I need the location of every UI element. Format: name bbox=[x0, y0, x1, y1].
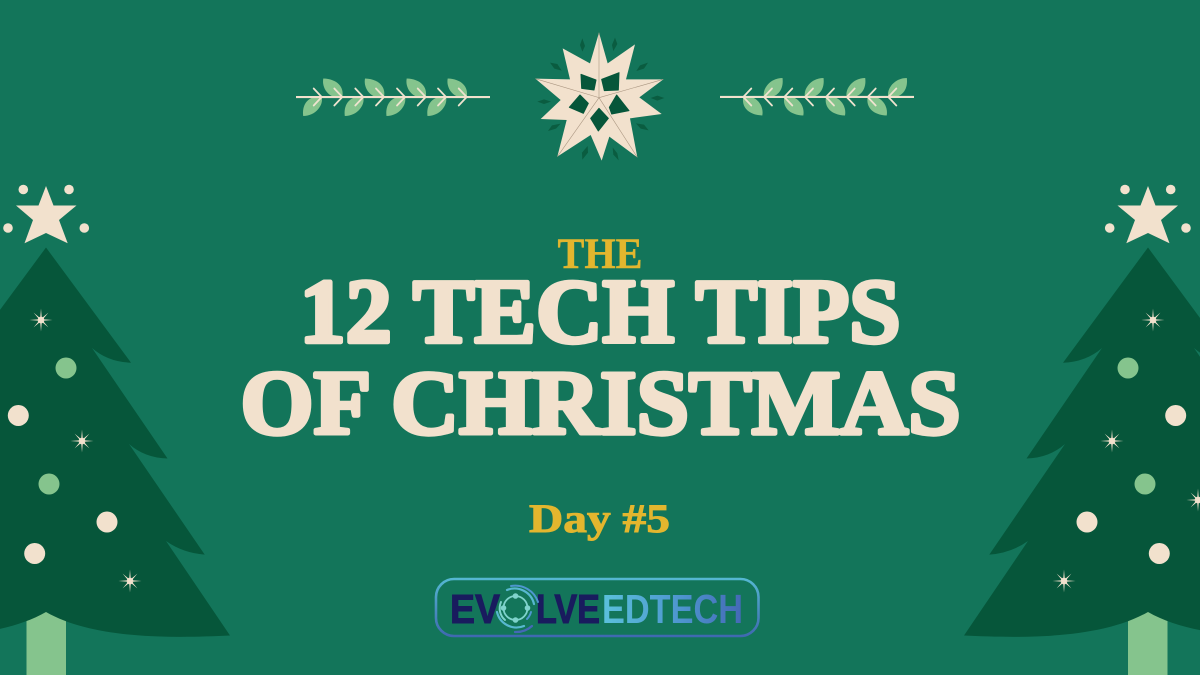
subheading: Day #5: Day #5 bbox=[529, 496, 670, 541]
title: OF CHRISTMAS bbox=[240, 352, 960, 454]
logo wordmark: EDTECH: EDTECH bbox=[602, 586, 743, 632]
logo wordmark: EVOLVE: EV bbox=[450, 586, 501, 632]
icon: folded paper star bbox=[535, 33, 664, 161]
title bbox=[240, 261, 960, 454]
icon: right christmas tree bbox=[964, 185, 1200, 675]
title: 12 TECH TIPS bbox=[300, 261, 900, 362]
icon: left leaf branch bbox=[296, 78, 490, 116]
icon: right leaf branch bbox=[720, 78, 914, 116]
logo ring emblem bbox=[497, 586, 538, 632]
icon: left christmas tree bbox=[0, 185, 230, 675]
logo wordmark: EVOLVE: LVE bbox=[536, 586, 600, 632]
logo border bbox=[436, 579, 758, 636]
heading: THE: THE bbox=[558, 231, 642, 278]
logo: Evolve EdTech bbox=[436, 579, 758, 636]
logo wordmark: EVOLVE bbox=[450, 586, 600, 632]
